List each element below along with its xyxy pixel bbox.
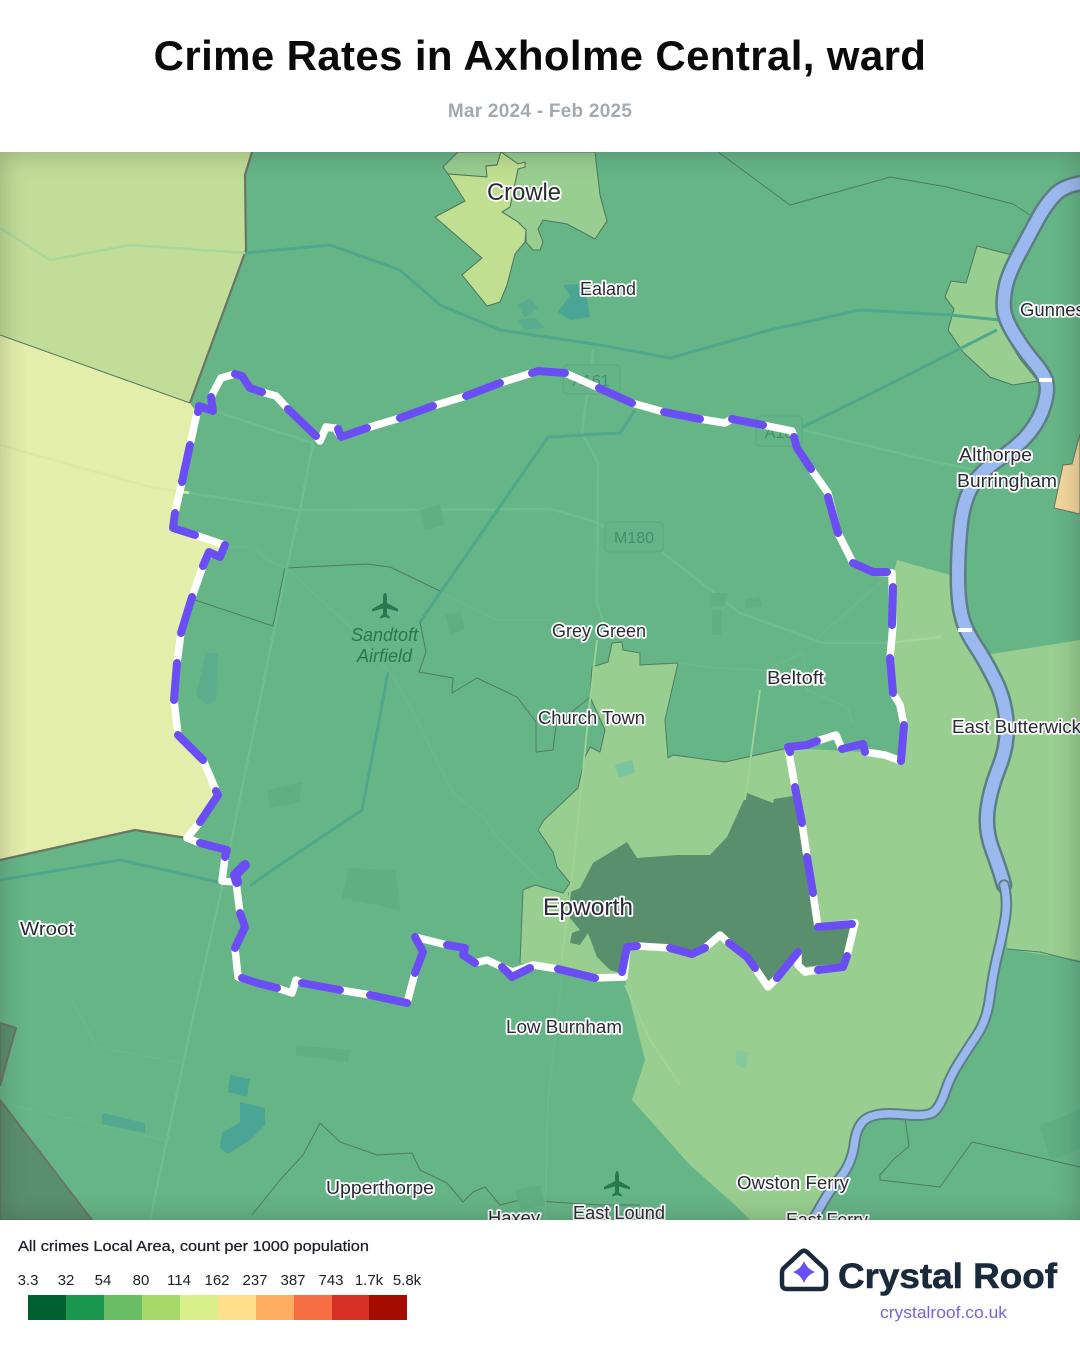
region: east Butterwick area <box>985 640 1080 960</box>
title: Crime Rates in Axholme Central, ward <box>154 32 926 79</box>
Crystal Roof logo <box>780 1248 1058 1322</box>
region: north-west neighbourhood <box>0 152 252 403</box>
label: Sandtoft Airfield: Airfield <box>356 646 413 666</box>
road shield: A18 <box>756 416 802 446</box>
region: south-west dark area <box>0 1100 92 1220</box>
region: Epworth and south-east light area <box>520 560 1008 1220</box>
region: west neighbourhood <box>0 335 225 860</box>
region: tan high-rate area <box>1054 434 1080 514</box>
icon: airfield plane East Lound <box>604 1171 630 1196</box>
place labels: Church Town <box>538 708 645 728</box>
place labels <box>20 179 1080 1230</box>
place labels: Owston Ferry <box>737 1173 849 1193</box>
legend <box>18 1238 422 1320</box>
legend scale values: 5.8k <box>393 1272 422 1289</box>
region: Crowle light area <box>443 152 607 250</box>
map panel <box>0 152 1080 1220</box>
place labels: Althorpe <box>959 445 1032 465</box>
place labels: Crowle <box>487 179 561 206</box>
ward boundary: white underlay <box>173 371 904 1003</box>
place labels: Ealand <box>580 279 636 299</box>
legend colour bar <box>28 1295 407 1320</box>
place labels: Grey Green <box>552 621 646 641</box>
legend scale values <box>18 1272 422 1289</box>
website link: crystalroof.co.uk <box>880 1304 1008 1322</box>
icon: airfield plane Sandtoft <box>372 593 398 618</box>
region: Gunness area <box>945 246 1038 385</box>
region: west dark sliver <box>0 1023 16 1086</box>
place labels: Burringham <box>957 471 1057 491</box>
road shield: A161: A161 <box>572 373 610 390</box>
legend title: All crimes Local Area, count per 1000 population <box>18 1238 369 1255</box>
label: Sandtoft Airfield <box>351 625 419 666</box>
map edge vignette <box>0 152 1080 1220</box>
icon: house outline with star <box>782 1251 826 1289</box>
road shield: M180 <box>605 522 663 552</box>
road shield: M180: M180 <box>614 530 654 547</box>
place labels: Beltoft <box>767 668 824 688</box>
canals and drains <box>0 228 1000 886</box>
place labels: Wroot <box>20 919 74 939</box>
ward boundary: purple dashes <box>173 371 904 1003</box>
legend scale values: 32 <box>58 1272 74 1289</box>
region: central dark lowest-rate area <box>568 793 855 982</box>
lakes and parcels <box>102 284 748 1154</box>
legend scale values: 80 <box>133 1272 149 1289</box>
legend scale values: 162 <box>204 1272 230 1289</box>
place labels: Epworth <box>543 894 633 921</box>
subtitle: date range: Mar 2024 - Feb 2025 <box>448 101 632 122</box>
region edge lines <box>0 152 1080 1215</box>
river Trent <box>810 182 1080 1225</box>
place labels: Upperthorpe <box>326 1178 434 1198</box>
legend scale values: 237 <box>242 1272 268 1289</box>
legend scale values: 1.7k <box>355 1272 384 1289</box>
label: Sandtoft Airfield: Sandtoft <box>351 625 419 645</box>
legend scale values: 3.3 <box>18 1272 38 1289</box>
minor roads <box>0 350 1040 1220</box>
legend scale values: 114 <box>167 1272 191 1289</box>
road shield: A18: A18 <box>765 425 793 442</box>
logo wordmark: Crystal Roof <box>838 1257 1057 1296</box>
place labels: Low Burnham <box>506 1017 622 1037</box>
region: Crowle yellow area <box>435 152 526 306</box>
legend scale values: 743 <box>318 1272 344 1289</box>
field parcels <box>268 505 1080 1210</box>
legend scale values: 54 <box>95 1272 111 1289</box>
road shield: A161 <box>563 365 620 394</box>
legend scale values: 387 <box>280 1272 306 1289</box>
place labels: East Butterwick <box>952 717 1080 737</box>
